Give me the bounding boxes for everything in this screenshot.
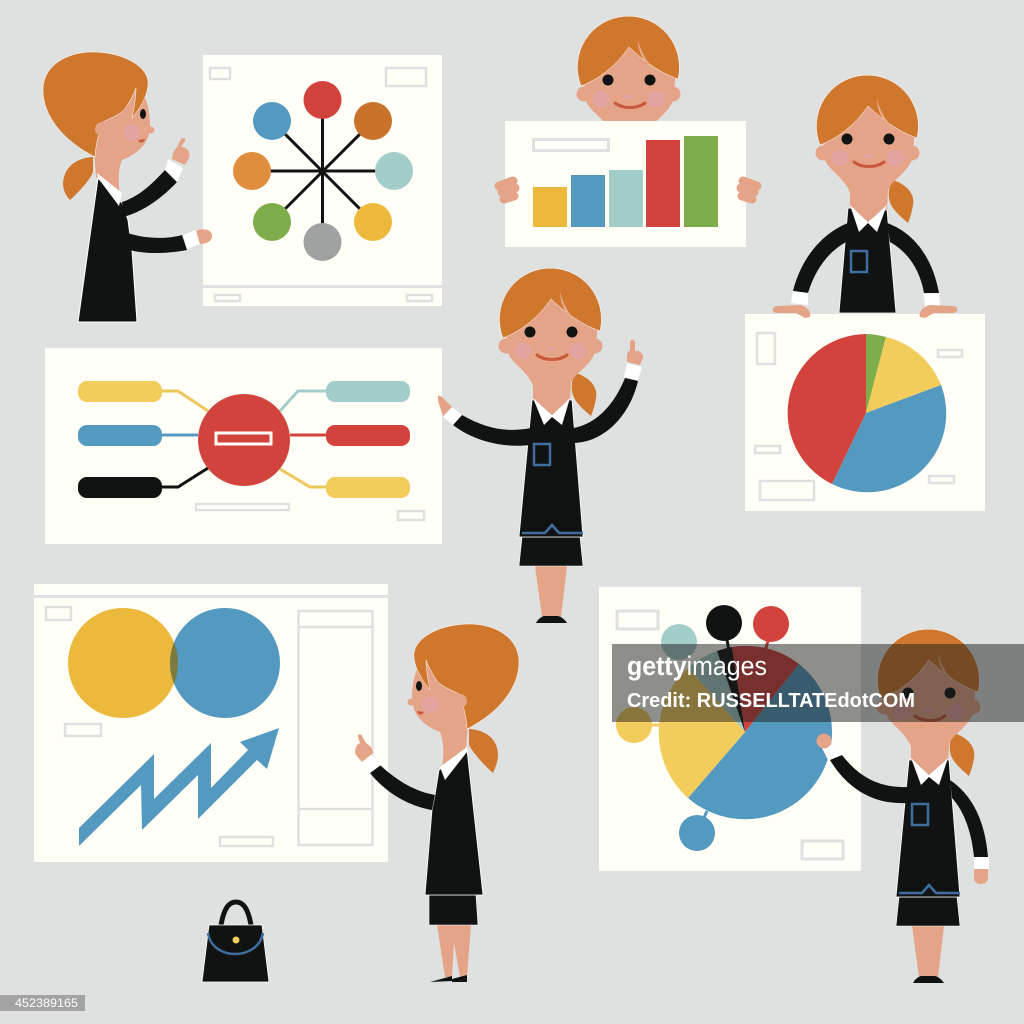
image id tag — [0, 995, 85, 1011]
figure: woman in profile pointing at venn panel — [355, 624, 519, 982]
icon: hands gripping bar chart panel — [499, 181, 757, 199]
bar chart bars — [533, 136, 718, 227]
panel: bar chart held up — [505, 121, 746, 247]
panel: pie chart — [745, 314, 985, 511]
figure: central woman pointing both ways — [438, 268, 643, 623]
panel: mind map — [45, 348, 442, 544]
figure: woman in profile pointing at radial diagram — [43, 52, 212, 322]
panel: radial circle diagram — [203, 55, 442, 306]
icon: zigzag growth arrow — [79, 728, 279, 846]
figure: head of presenter behind bar chart — [576, 16, 680, 134]
panel: venn diagram and rising arrow — [34, 584, 388, 862]
figure: woman above pie chart — [772, 75, 958, 318]
image id tag: 452389165 — [15, 998, 78, 1010]
watermark banner: Credit: RUSSELLTATEdotCOM — [627, 690, 915, 712]
panel: exploded pie diagram — [599, 587, 861, 871]
figure: woman pointing at exploded pie — [816, 629, 989, 983]
icon: handbag — [202, 902, 269, 982]
watermark banner — [612, 644, 1024, 722]
watermark banner: gettyimages — [627, 651, 767, 681]
